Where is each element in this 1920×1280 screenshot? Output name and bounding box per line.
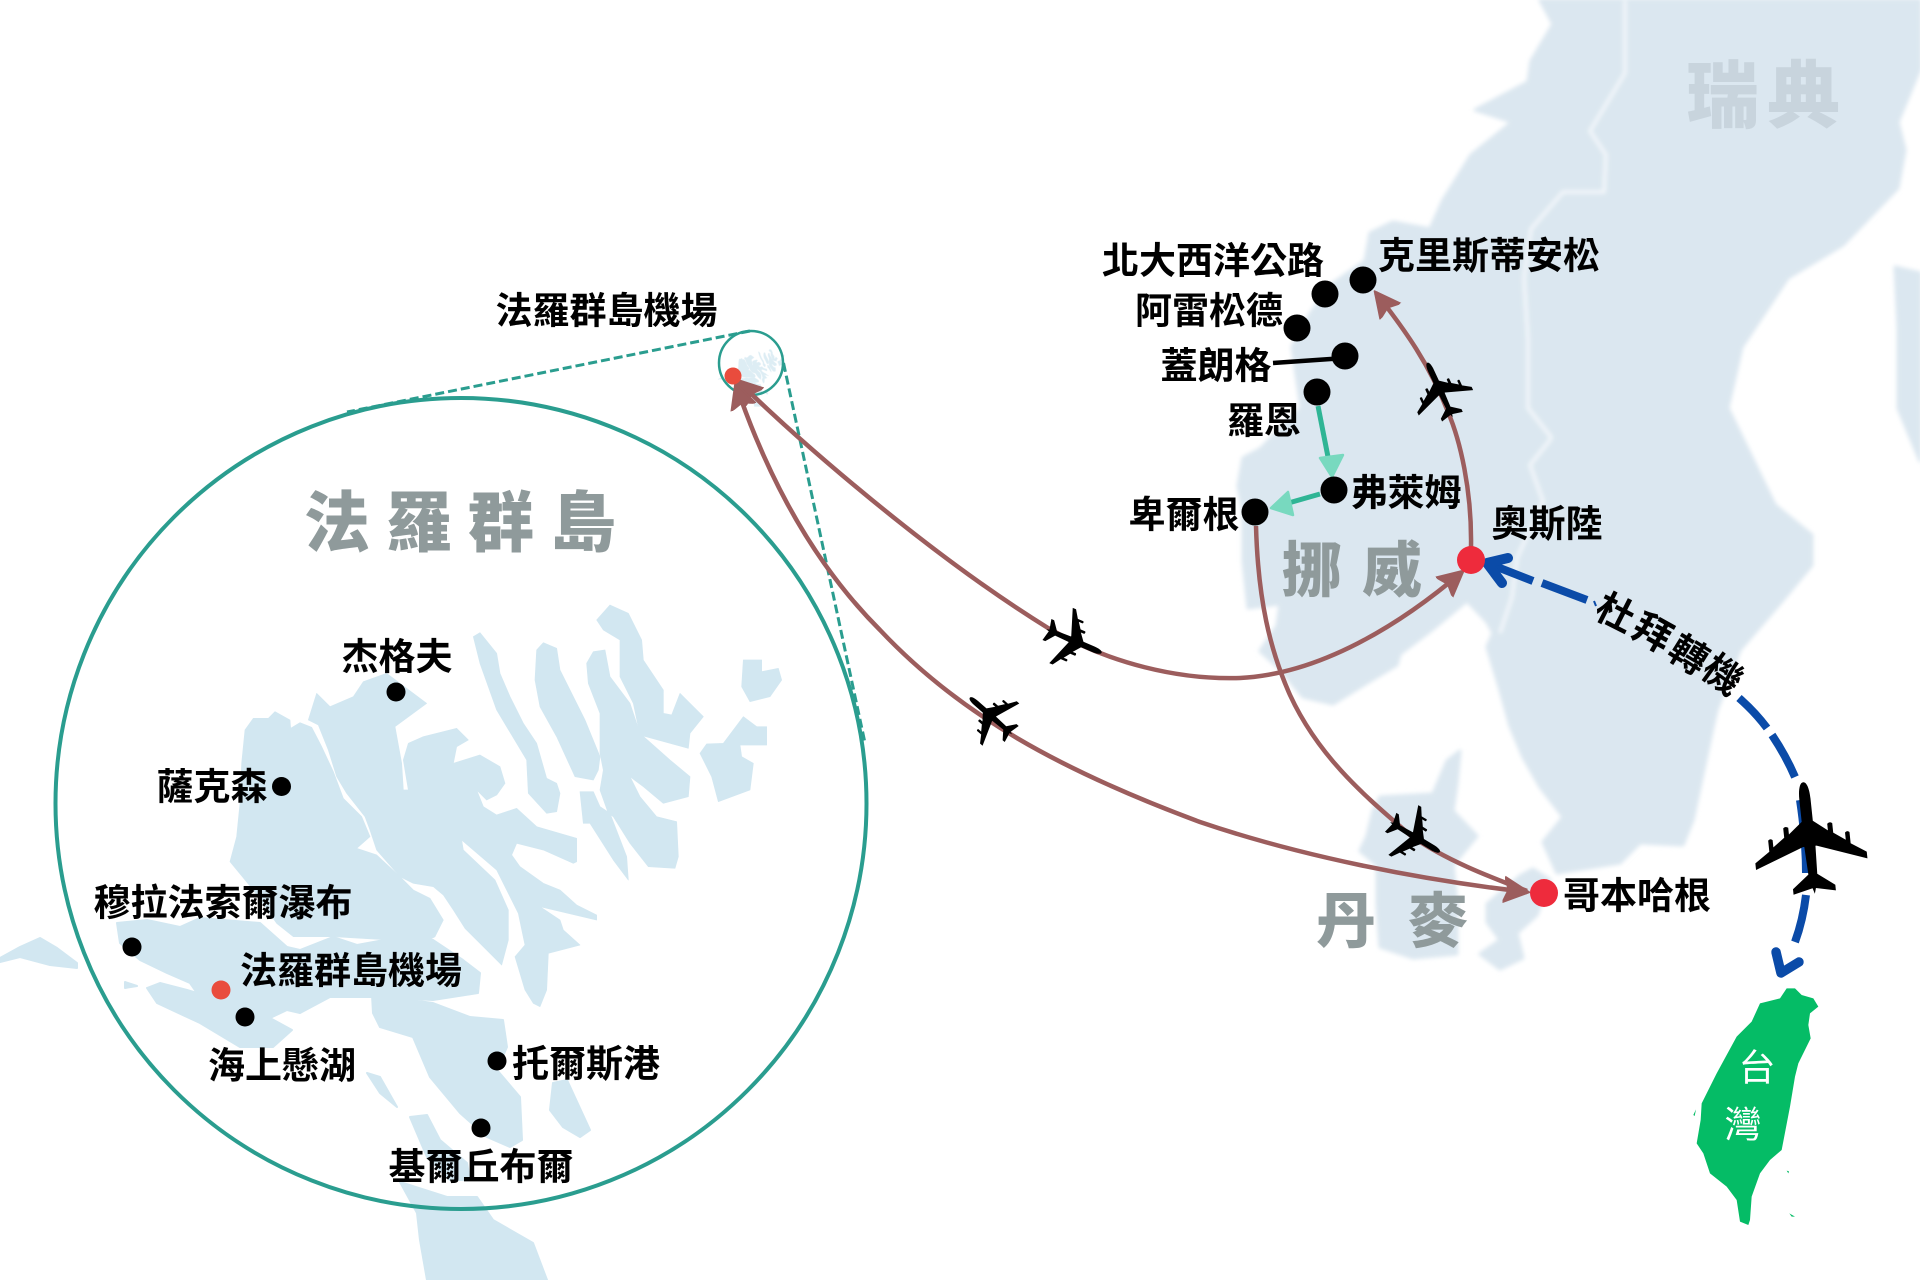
map: Faroe Islands enlarged bbox=[0, 605, 782, 1280]
labels: Norway and Denmark stops: 奧斯陸 bbox=[1492, 504, 1602, 544]
locator circle: Faroe position bbox=[718, 331, 784, 407]
labels: Norway and Denmark stops: 羅恩 bbox=[1227, 400, 1301, 442]
map: Scandinavia land bbox=[1238, 0, 1920, 969]
hubs: Oslo and Copenhagen bbox=[1457, 546, 1558, 907]
labels: Norway and Denmark stops: 蓋朗格 bbox=[1160, 346, 1272, 386]
labels: Norway and Denmark stops: 弗萊姆 bbox=[1350, 472, 1462, 514]
leader: Geiranger bbox=[1273, 358, 1345, 363]
labels: Faroe inset bbox=[94, 636, 660, 1188]
labels: Faroe inset: 薩克森 bbox=[156, 766, 268, 808]
labels: Norway and Denmark stops: 克里斯蒂安松 bbox=[1378, 236, 1600, 276]
labels: Norway and Denmark stops: 北大西洋公路 bbox=[1102, 240, 1324, 282]
label: Dubai transfer: 杜 bbox=[1589, 587, 1641, 641]
airport marker: inset bbox=[212, 980, 230, 1000]
labels: Faroe inset: 法羅群島機場 bbox=[240, 950, 462, 992]
stops: Norway bbox=[1242, 266, 1376, 526]
icon: plane near Kristiansund bbox=[1400, 350, 1480, 430]
icon: plane on Oslo route bbox=[1035, 602, 1113, 680]
labels: Faroe inset: 托爾斯港 bbox=[512, 1044, 660, 1084]
label: Dubai transfer bbox=[1589, 587, 1750, 704]
labels: Faroe inset: 穆拉法索爾瀑布 bbox=[94, 882, 352, 924]
icon: plane on Copenhagen route bbox=[951, 676, 1031, 756]
labels: Norway and Denmark stops: 哥本哈根 bbox=[1563, 876, 1711, 916]
labels: Norway and Denmark stops bbox=[1102, 236, 1711, 916]
road arrow: Loen to Flam bbox=[1318, 406, 1343, 477]
heading: Denmark: 丹麥 bbox=[1316, 888, 1500, 956]
icon: plane over Denmark bbox=[1375, 797, 1455, 877]
labels: Norway and Denmark stops: 阿雷松德 bbox=[1135, 290, 1283, 332]
heading: Sweden: 瑞典 bbox=[1686, 56, 1848, 138]
route: Dubai transfer dashes bbox=[1487, 558, 1806, 973]
stops: Faroe inset bbox=[122, 682, 506, 1138]
label: Taiwan: 台 bbox=[1738, 1048, 1776, 1088]
heading: Norway: 挪威 bbox=[1282, 538, 1442, 604]
icon: large plane bbox=[1747, 776, 1871, 900]
label: Dubai transfer: 機 bbox=[1694, 648, 1750, 704]
heading: Faroe Islands: 法羅群島 bbox=[304, 486, 632, 560]
label: Taiwan: 灣 bbox=[1724, 1104, 1762, 1146]
labels: Faroe inset: 基爾丘布爾 bbox=[388, 1146, 574, 1188]
zoom lines: dashed connectors bbox=[347, 331, 865, 743]
map: Taiwan bbox=[1693, 988, 1818, 1225]
label: Taiwan bbox=[1724, 1048, 1776, 1146]
road arrow: Flam to Bergen bbox=[1271, 492, 1320, 515]
route: Oslo to Faroe bbox=[738, 381, 1462, 678]
route: Faroe to Copenhagen bbox=[736, 385, 1527, 892]
route: Bergen to Copenhagen bbox=[1256, 526, 1527, 891]
labels: Faroe inset: 海上懸湖 bbox=[208, 1046, 356, 1086]
label: Dubai transfer: 拜 bbox=[1625, 606, 1679, 662]
inset circle: Faroe enlarged bbox=[56, 398, 866, 1209]
label: Dubai transfer: 轉 bbox=[1661, 628, 1715, 684]
label: Faroe airport locator: 法羅群島機場 bbox=[496, 290, 718, 332]
labels: Faroe inset: 杰格夫 bbox=[342, 636, 452, 678]
airport marker: locator bbox=[724, 368, 742, 384]
route: Oslo to Kristiansund bbox=[1376, 293, 1471, 547]
labels: Norway and Denmark stops: 卑爾根 bbox=[1128, 494, 1240, 536]
